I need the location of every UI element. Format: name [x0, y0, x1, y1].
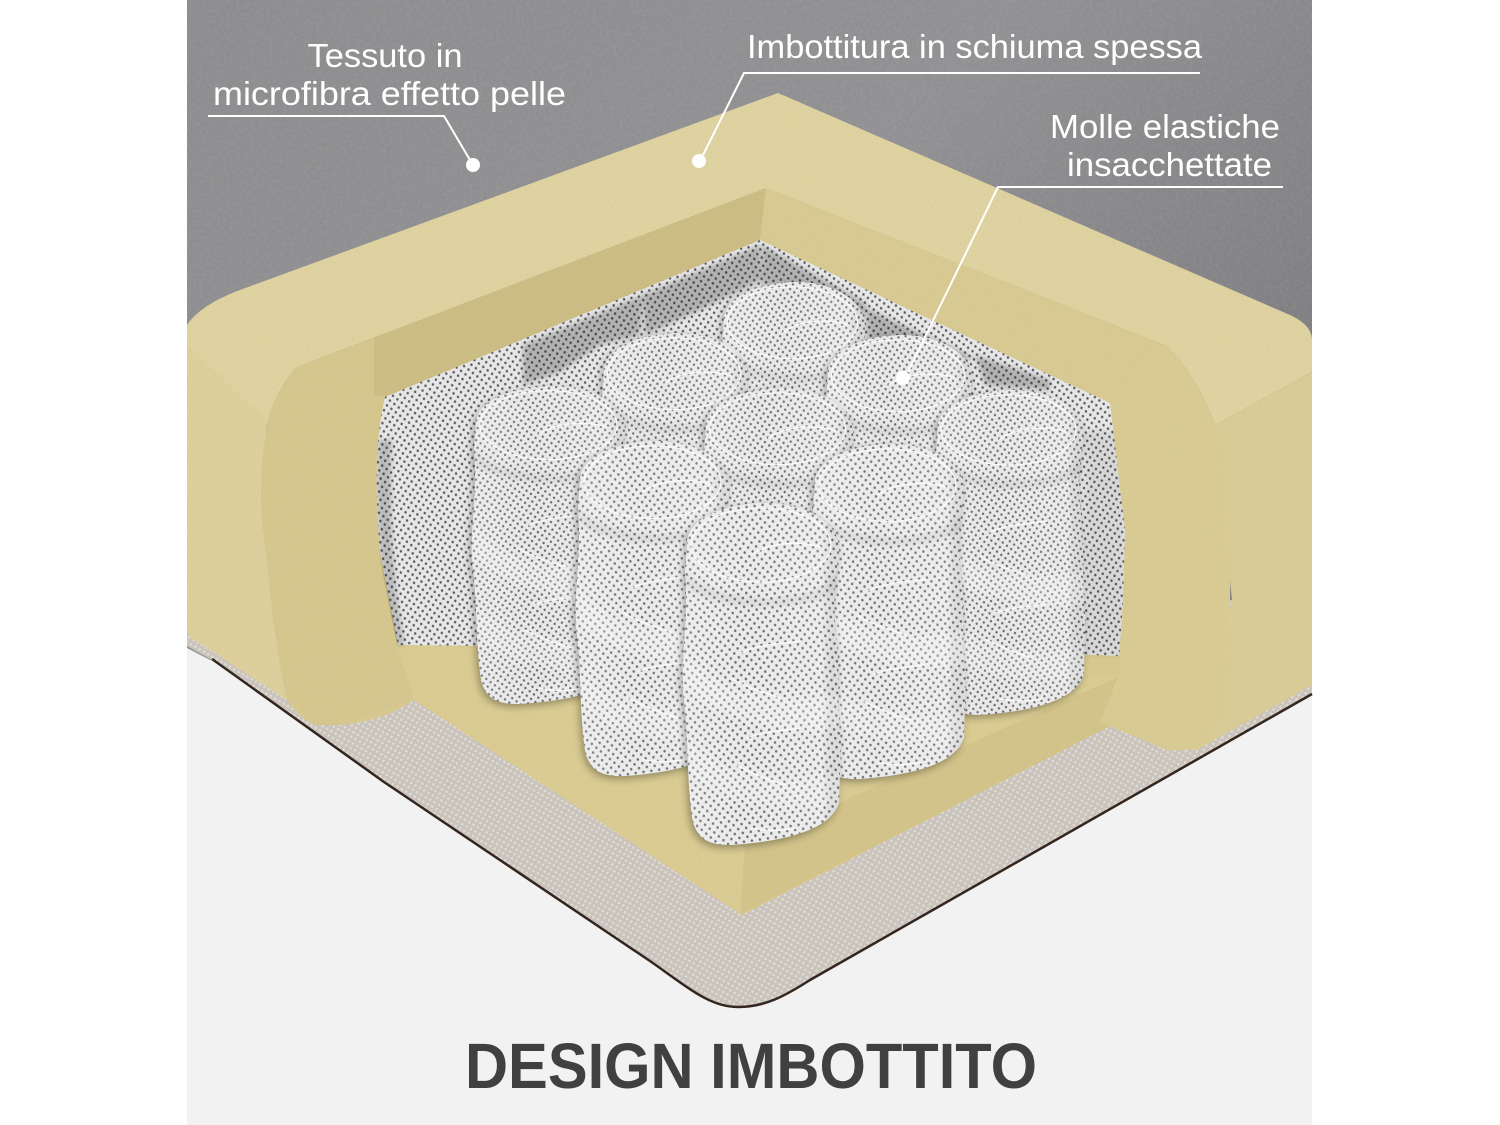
- foam inner wall left: [297, 188, 766, 397]
- foam base slab: [414, 681, 1115, 915]
- grey microfibre upholstery: [187, 0, 1312, 660]
- background panel: [187, 0, 1312, 1125]
- callout: fabric: Tessuto in: [308, 37, 462, 74]
- pocket spring back row: [598, 282, 974, 670]
- callout: pocket springs: Molle elastiche: [1050, 108, 1280, 145]
- foam grain texture: [187, 90, 1312, 760]
- callout: fabric: [208, 37, 566, 172]
- callout: pocket springs: [896, 108, 1283, 385]
- foam inner wall right: [760, 188, 1165, 403]
- pocket spring middle row: [470, 386, 1086, 723]
- beige base fabric: [187, 600, 1312, 1008]
- infographic: mattress cross-section: [187, 0, 1313, 1125]
- back spring mesh: [370, 236, 1130, 656]
- foam left outer face: [187, 345, 317, 725]
- foam frame top surface: [187, 93, 1312, 425]
- title: DESIGN IMBOTTITO: [465, 1030, 1037, 1102]
- callout: fabric: microfibra effetto pelle: [213, 75, 566, 112]
- foam underlay: [267, 188, 1230, 750]
- white underside panel: [187, 648, 1312, 1125]
- foam right outer face: [1197, 372, 1312, 750]
- foam left cut face: [261, 338, 414, 725]
- foam right cut face: [1100, 345, 1230, 750]
- dark base line: [212, 659, 1312, 1007]
- callout: foam padding: [692, 28, 1203, 168]
- pocket spring front row: [574, 441, 966, 848]
- callout: pocket springs: insacchettate: [1067, 146, 1272, 183]
- slab front face: [740, 677, 1118, 915]
- callout: foam padding: Imbottitura in schiuma spessa: [747, 28, 1203, 65]
